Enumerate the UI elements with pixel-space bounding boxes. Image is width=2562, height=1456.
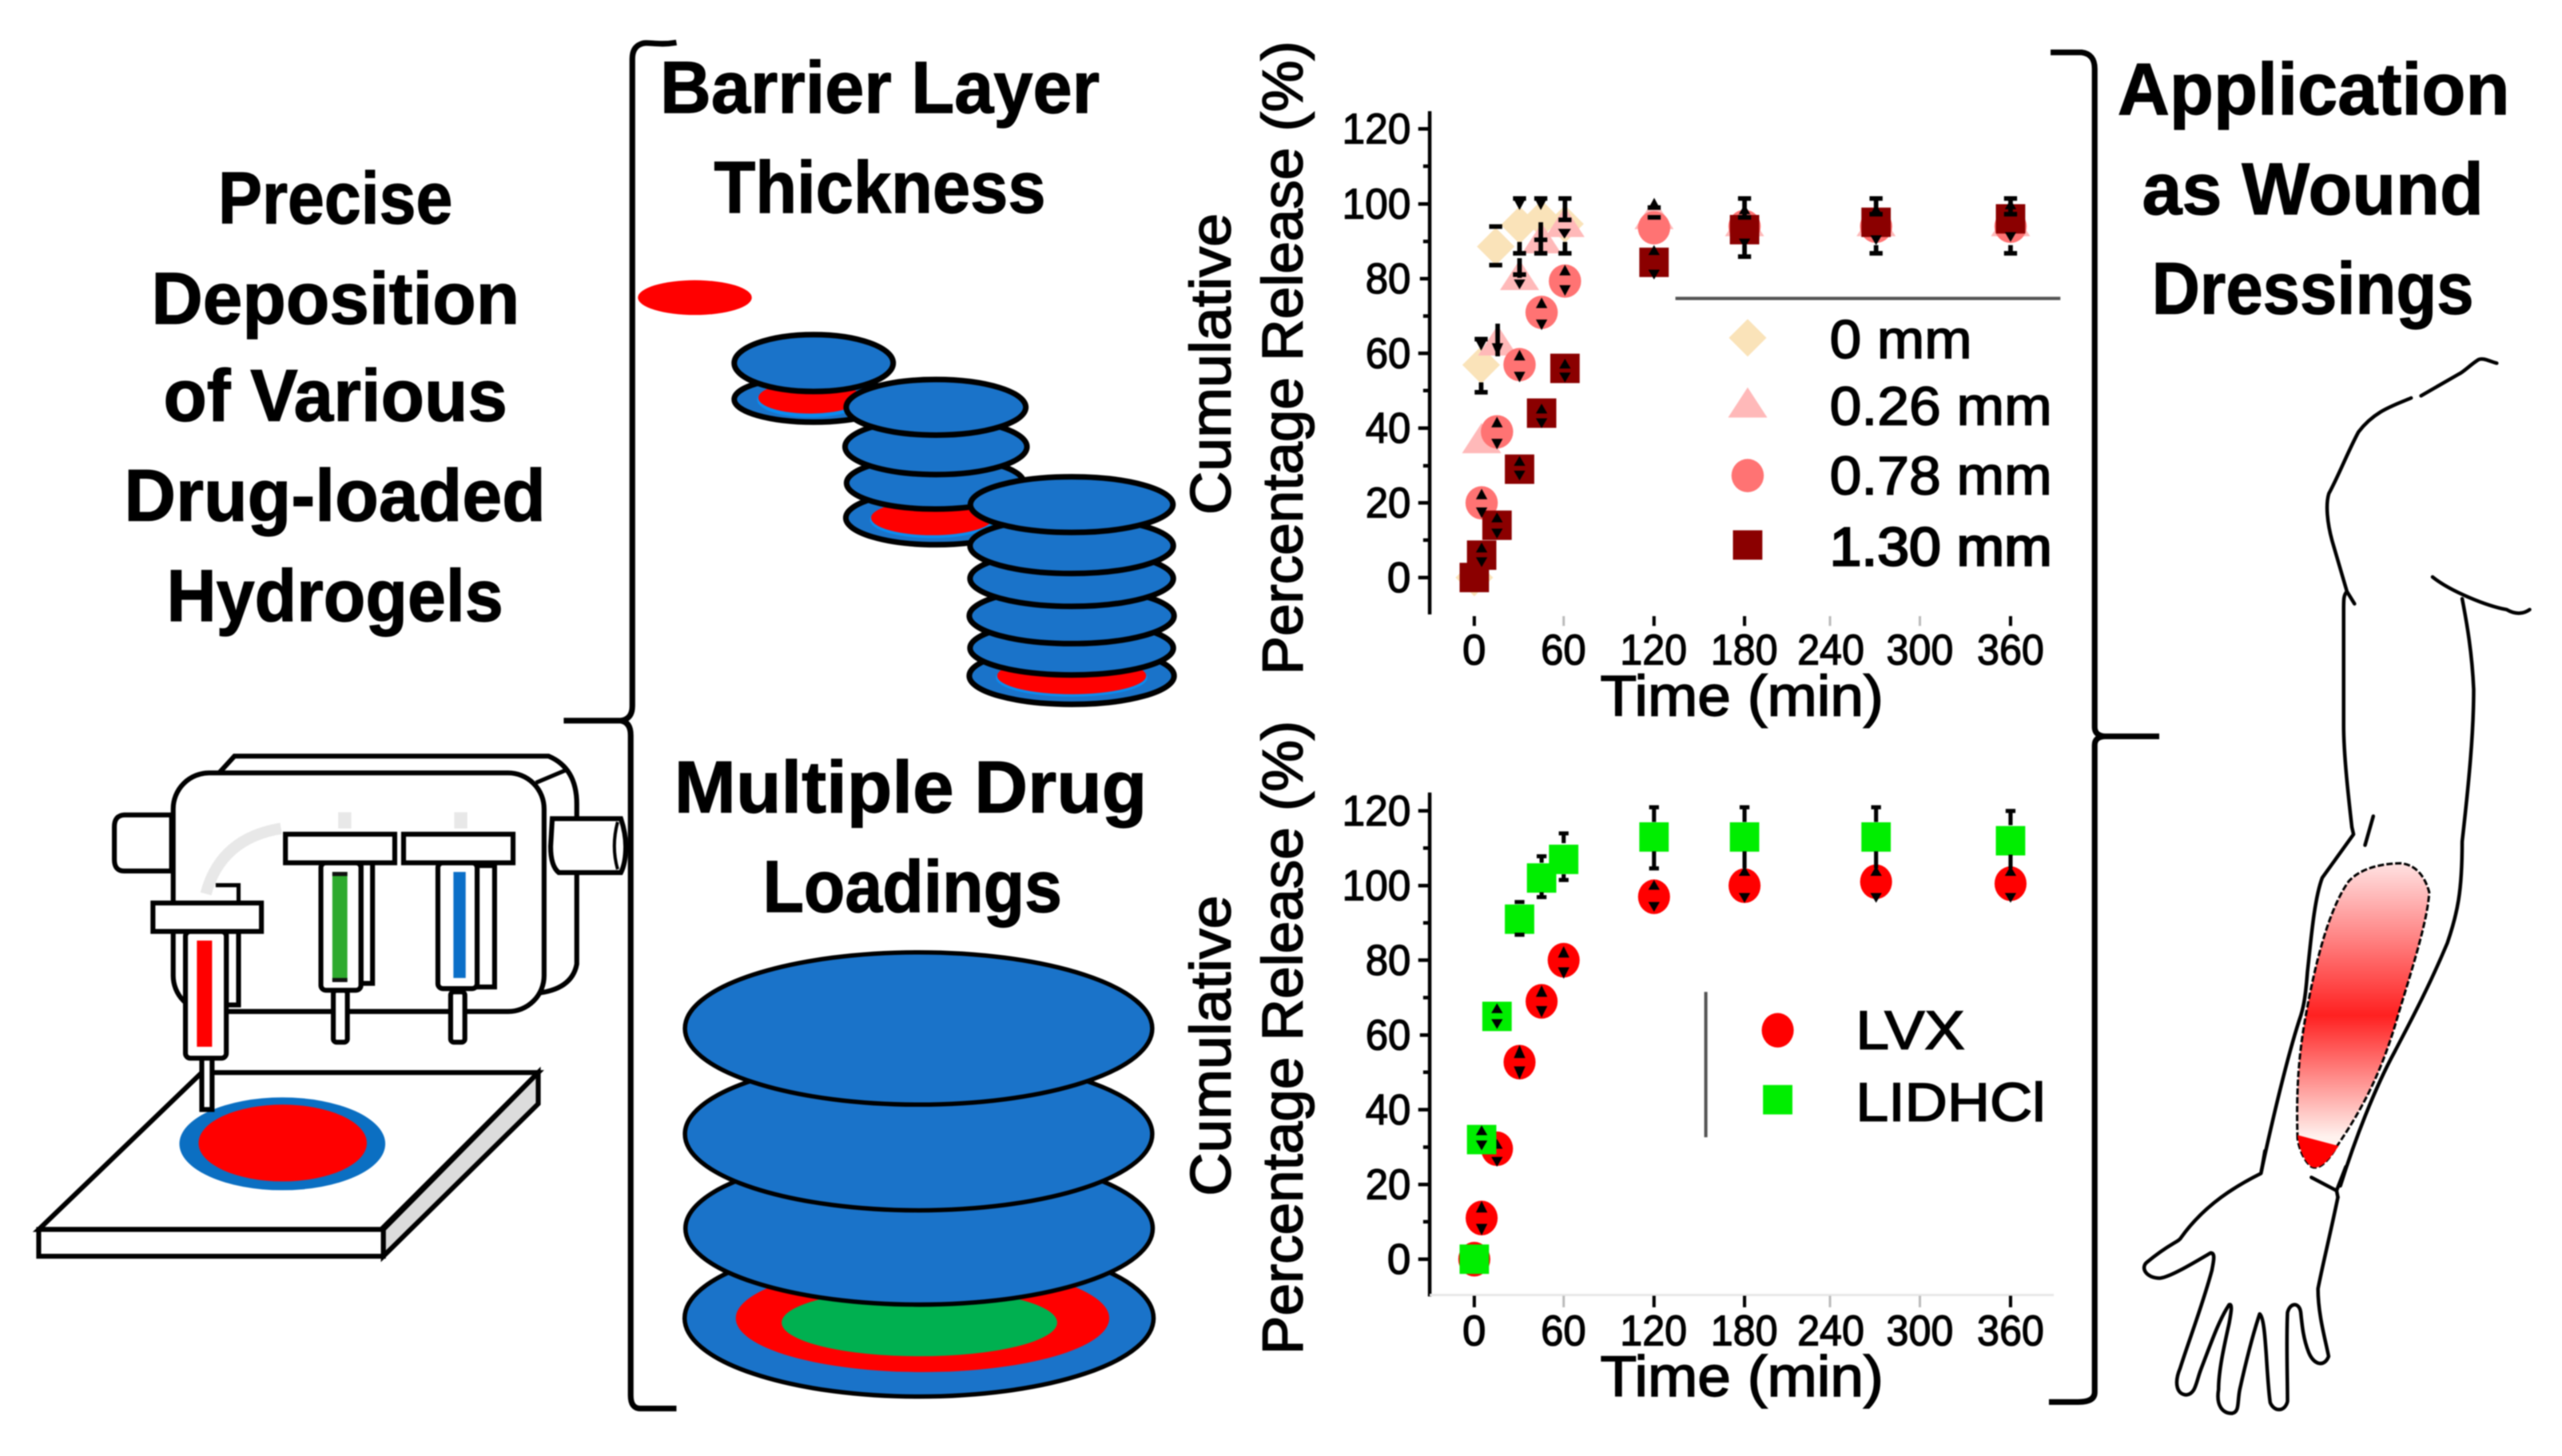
y axis: 0 — [1387, 1235, 1410, 1283]
dressing with red gradient — [2297, 863, 2429, 1168]
y axis: 120 — [1342, 105, 1410, 153]
y axis title: Cumulative — [1180, 213, 1243, 515]
y axis: 100 — [1342, 181, 1410, 229]
x axis: 360 — [1977, 626, 2044, 674]
x axis: 60 — [1541, 626, 1586, 674]
y axis title: Percentage Release (%) — [1251, 721, 1315, 1355]
heading: barrier layer thickness: Barrier Layer — [660, 47, 1100, 129]
y axis: 20 — [1366, 1161, 1410, 1209]
legend: barrier thickness — [1676, 298, 2060, 578]
legend: drugs — [1706, 992, 2045, 1137]
error bars: LIDHCl — [1476, 807, 2015, 1151]
y axis: 40 — [1366, 1086, 1410, 1134]
legend: barrier thickness: 0.78 mm — [1830, 447, 2052, 507]
heading: application as wound dressings: Dressings — [2152, 249, 2474, 330]
heading: precise deposition: of Various — [163, 356, 507, 437]
legend: drugs: LVX — [1856, 1001, 1964, 1060]
x axis — [1462, 616, 2044, 729]
heading: barrier layer thickness: Thickness — [714, 147, 1046, 229]
heading: precise deposition: Precise — [218, 158, 452, 240]
x axis: 240 — [1797, 1307, 1864, 1355]
x axis: 120 — [1620, 626, 1687, 674]
x axis: Time (min) — [1601, 665, 1884, 729]
heading: barrier layer thickness — [660, 47, 1100, 229]
legend: drugs: LIDHCl — [1856, 1072, 2045, 1132]
series: 0.78 mm — [1466, 209, 2027, 519]
series: 0.26 mm — [1462, 199, 2030, 453]
heading: precise deposition: Deposition — [151, 258, 519, 340]
hand outline — [2144, 1151, 2346, 1414]
x axis: 60 — [1541, 1307, 1586, 1355]
x axis — [1462, 1296, 2044, 1409]
heading: multiple drug loadings: Loadings — [762, 846, 1062, 928]
series: 0 mm — [1455, 200, 1584, 596]
x axis: 120 — [1620, 1307, 1687, 1355]
arm outline — [2262, 359, 2530, 1186]
series: LVX — [1458, 865, 2027, 1276]
error bars: LVX — [1476, 866, 2016, 1235]
icon: stacked layers of increasing barrier thickness — [638, 280, 1174, 704]
heading: precise deposition: Hydrogels — [167, 555, 503, 637]
blue syringe — [404, 834, 513, 1042]
error bars — [1474, 198, 2017, 567]
y axis: 0 — [1387, 554, 1410, 602]
legend: barrier thickness: 0 mm — [1830, 310, 1971, 370]
y axis: 60 — [1366, 330, 1410, 378]
y axis — [1342, 105, 1430, 615]
y axis title: Cumulative — [1180, 896, 1243, 1196]
legend: barrier thickness: 0.26 mm — [1830, 377, 2052, 437]
five-layer barrier stack — [969, 477, 1174, 704]
build platform with printed disc — [38, 1072, 539, 1256]
x axis: Time (min) — [1601, 1345, 1884, 1409]
x axis: 180 — [1711, 626, 1778, 674]
y axis title — [1180, 41, 1315, 675]
y axis: 100 — [1342, 862, 1410, 910]
heading: precise deposition — [124, 158, 546, 637]
y axis — [1342, 787, 2054, 1296]
heading: multiple drug loadings: Multiple Drug — [674, 746, 1147, 828]
y axis: 40 — [1366, 404, 1410, 452]
x axis: 180 — [1711, 1307, 1778, 1355]
red syringe — [153, 885, 261, 1109]
x axis: 0 — [1462, 626, 1486, 674]
icon: arm with wound dressing — [2144, 359, 2530, 1414]
green syringe — [285, 834, 395, 1042]
right bracket — [2049, 53, 2159, 1402]
icon: 3D bioprinter with three syringes — [38, 756, 626, 1256]
three-layer barrier stack — [845, 380, 1027, 545]
chart: release of multiple drugs — [1180, 721, 2054, 1409]
y axis title: Percentage Release (%) — [1251, 41, 1315, 675]
y axis: 20 — [1366, 479, 1410, 527]
heading: application as wound dressings: Application — [2118, 49, 2510, 130]
single red drug layer — [638, 280, 752, 315]
heading: precise deposition: Drug-loaded — [124, 455, 546, 536]
y axis: 80 — [1366, 255, 1410, 303]
x axis: 300 — [1887, 626, 1953, 674]
left bracket: barrier and multiple drug sections — [563, 42, 676, 1409]
legend: barrier thickness: 1.30 mm — [1830, 518, 2052, 578]
series: LIDHCl — [1459, 822, 2025, 1274]
x axis: 300 — [1887, 1307, 1953, 1355]
y axis: 80 — [1366, 937, 1410, 985]
x axis: 0 — [1462, 1307, 1486, 1355]
icon: large stack with red and green drug layers — [685, 953, 1154, 1397]
heading: application as wound dressings — [2118, 49, 2510, 330]
y axis title — [1180, 721, 1315, 1355]
x axis: 360 — [1977, 1307, 2044, 1355]
chart: release by barrier layer thickness — [1180, 41, 2060, 729]
series: 1.30 mm — [1459, 204, 2025, 592]
heading: multiple drug loadings — [674, 746, 1147, 928]
heading: application as wound dressings: as Wound — [2142, 149, 2484, 230]
one-layer barrier stack — [734, 335, 893, 422]
y axis: 60 — [1366, 1012, 1410, 1060]
x axis: 240 — [1797, 626, 1864, 674]
y axis: 120 — [1342, 787, 1410, 835]
